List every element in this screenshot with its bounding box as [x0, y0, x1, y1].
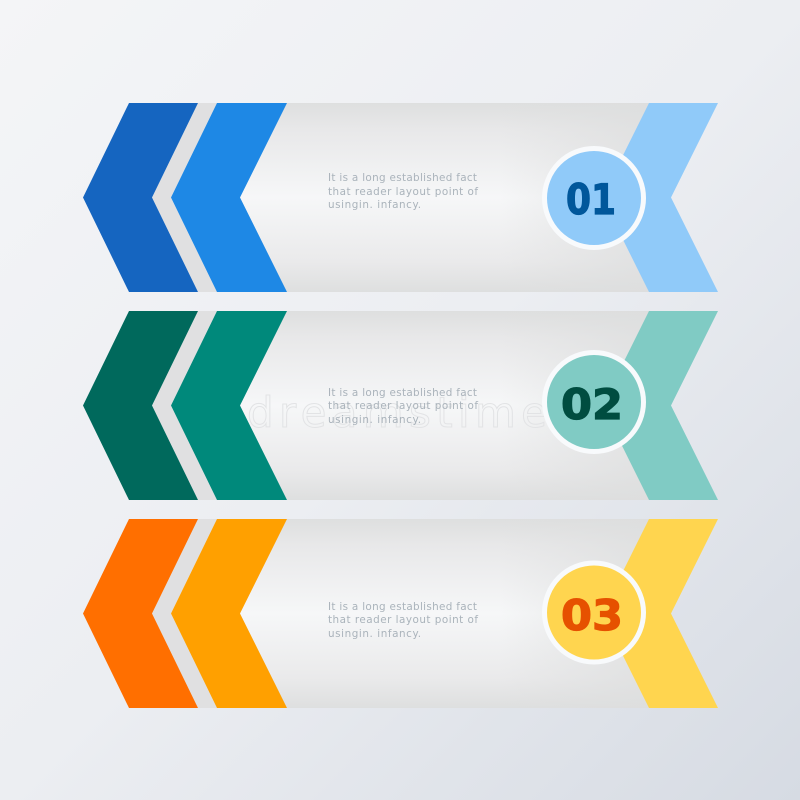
left outer chevron 01: [83, 103, 198, 292]
text block 01: It is a long established fact: [328, 172, 477, 184]
number badge 03: 03: [561, 591, 623, 640]
number badge 01: 01: [566, 175, 616, 224]
panel: row 01: [83, 103, 718, 292]
right chevron 02: [602, 311, 718, 500]
number badge 01: [544, 148, 644, 248]
banner body 02: [152, 311, 650, 500]
banner body 01: [152, 103, 650, 292]
text block 01: usingin. infancy.: [328, 199, 421, 211]
panel: row 03: [83, 519, 718, 708]
left outer chevron 03: [83, 519, 198, 708]
right chevron 01: [602, 103, 718, 292]
left outer chevron 02: [83, 311, 198, 500]
text block 02: usingin. infancy.: [328, 414, 421, 426]
number badge 03: [544, 563, 644, 662]
left inner chevron 03: [171, 519, 287, 708]
text block 03: usingin. infancy.: [328, 628, 421, 640]
text block 02: that reader layout point of: [328, 400, 478, 412]
left inner chevron 01: [171, 103, 287, 292]
right chevron 03: [602, 519, 718, 708]
number badge 02: [544, 352, 644, 452]
text block 03: that reader layout point of: [328, 614, 478, 626]
banner body 03: [152, 519, 650, 708]
text block 03: It is a long established fact: [328, 601, 477, 613]
text block 01: [328, 172, 478, 211]
number badge 02: 02: [561, 380, 623, 429]
text block 02: It is a long established fact: [328, 387, 477, 399]
text block 01: that reader layout point of: [328, 186, 478, 198]
watermark: dreamstime: [247, 388, 547, 437]
left inner chevron 02: [171, 311, 287, 500]
panel: row 02: [83, 311, 718, 500]
text block 03: [328, 601, 478, 640]
text block 02: [328, 387, 478, 426]
